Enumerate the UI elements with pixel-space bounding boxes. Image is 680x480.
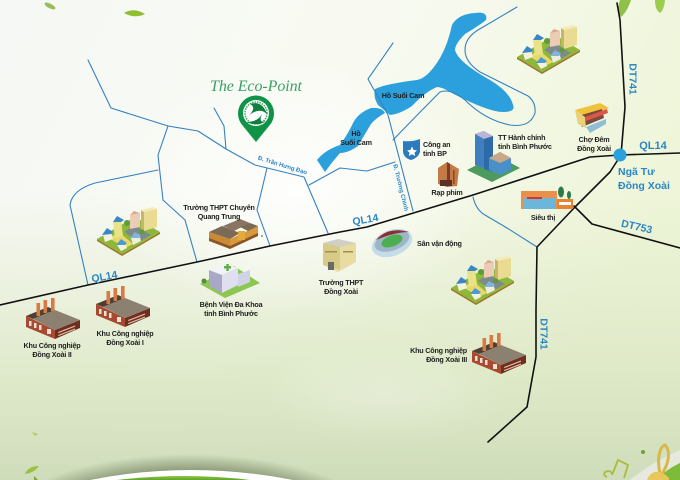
admin centre: TT Hành chính: [498, 133, 545, 142]
road labels: Ngã Tư: [618, 166, 655, 178]
factory: Đồng Xoài I: Khu Công nghiệp: [97, 329, 154, 338]
school: THPT Đồng Xoài: Đồng Xoài: [324, 287, 358, 296]
cinema: [431, 162, 463, 197]
supermarket: [521, 186, 573, 222]
logo title: The Eco-Point: [210, 78, 303, 95]
road labels: DT741: [538, 318, 550, 350]
lake labels: Hồ: [351, 129, 361, 138]
police shield: Công an: [423, 140, 450, 149]
factory: Đồng Xoài II: [24, 298, 81, 359]
night market: Đồng Xoài: [577, 144, 611, 153]
lake labels: [340, 91, 424, 147]
road labels: Đ. Trường Chinh: [391, 164, 409, 212]
factory: Đồng Xoài III: Đồng Xoài III: [426, 355, 467, 364]
road labels: QL14: [91, 269, 119, 285]
factory: Đồng Xoài I: [96, 286, 154, 347]
factory: Đồng Xoài III: [410, 333, 526, 374]
lake labels: Hồ Suối Cam: [382, 91, 424, 100]
hospital: Bệnh Viện Đa Khoa: [200, 300, 264, 309]
cinema: Rạp phim: [431, 188, 463, 197]
school: Quang Trung: Trường THPT Chuyên: [183, 203, 255, 212]
admin centre: [467, 131, 552, 182]
police shield: tỉnh BP: [423, 149, 447, 158]
factory: Đồng Xoài II: Đồng Xoài II: [32, 350, 72, 359]
lake labels: Suối Cam: [340, 138, 372, 147]
road labels: DT741: [626, 63, 638, 95]
logo: The Eco-Point: [210, 78, 303, 142]
music decoration: [604, 445, 680, 480]
location pin: [238, 96, 274, 142]
school: THPT Đồng Xoài: Trường THPT: [319, 278, 364, 287]
night market: [575, 103, 611, 153]
stadium: [368, 224, 462, 262]
night market: Chợ Đêm: [579, 135, 609, 144]
road labels: [91, 63, 670, 350]
admin centre: tỉnh Bình Phước: [498, 142, 552, 151]
factory: Đồng Xoài III: Khu Công nghiệp: [410, 346, 468, 355]
road labels: DT753: [620, 218, 654, 237]
road labels: Đ. Trần Hưng Đạo: [257, 156, 308, 176]
junction marker: [614, 148, 626, 162]
stadium: Sân vận động: [417, 239, 462, 248]
factory: Đồng Xoài II: Khu Công nghiệp: [24, 341, 81, 350]
school: THPT Đồng Xoài: [319, 239, 364, 296]
hospital: [200, 264, 264, 318]
road labels: Đồng Xoài: [618, 180, 670, 192]
school: Quang Trung: [183, 203, 263, 249]
police shield: [403, 139, 450, 160]
house clusters: [97, 25, 580, 305]
road labels: QL14: [352, 212, 380, 228]
local roads (blue): [70, 7, 537, 285]
supermarket: Siêu thị: [531, 213, 555, 222]
hospital: tỉnh Bình Phước: [204, 309, 258, 318]
factory: Đồng Xoài I: Đồng Xoài I: [106, 338, 144, 347]
school: Quang Trung: Quang Trung: [198, 212, 240, 221]
road labels: QL14: [639, 140, 668, 152]
lakes: [317, 13, 514, 172]
decorative arc at bottom: [0, 440, 400, 480]
